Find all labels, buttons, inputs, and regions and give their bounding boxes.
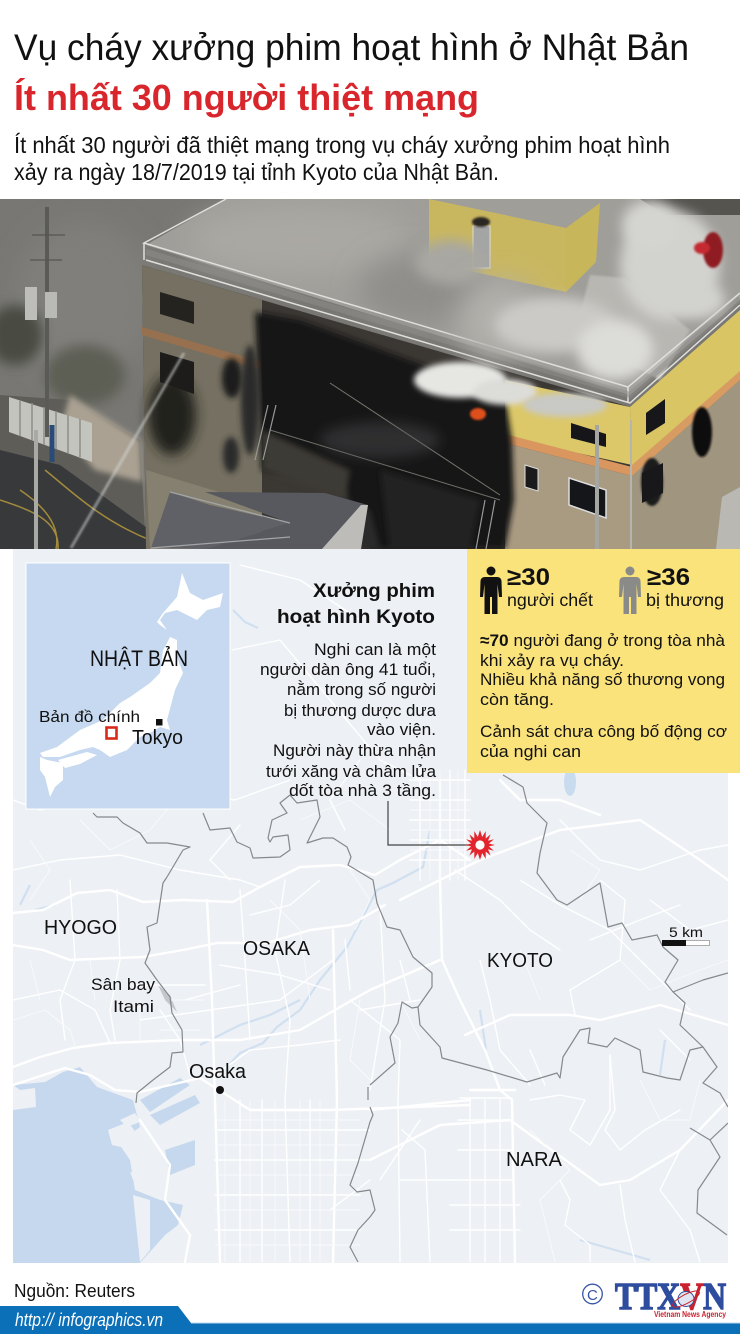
panel: casualty figures bbox=[467, 549, 740, 773]
Tokyo marker: Tokyo bbox=[132, 727, 183, 749]
icon: fire location burst bbox=[465, 830, 495, 860]
callout text: người dàn ông 41 tuổi, bbox=[260, 660, 436, 679]
panel text: Cảnh sát chưa công bố động cơ bbox=[480, 722, 727, 741]
callout text: nằm trong số người bbox=[287, 680, 436, 699]
logo: TTXVN: C bbox=[587, 1287, 598, 1304]
map labels: Itami bbox=[113, 997, 154, 1016]
map: Kansai region bbox=[13, 549, 728, 1263]
panel text: còn tăng. bbox=[480, 690, 554, 709]
title: Ít nhất 30 người thiệt mạng bbox=[14, 77, 479, 118]
callout text: Nghi can là một bbox=[314, 640, 436, 659]
walls bbox=[142, 265, 632, 549]
callout text: Người này thừa nhận bbox=[273, 741, 436, 760]
burn marks bbox=[255, 312, 514, 549]
panel text: Nhiều khả năng số thương vong bbox=[480, 670, 725, 689]
stat: dead bbox=[507, 564, 593, 610]
map labels: HYOGO bbox=[44, 916, 117, 939]
prefecture borders bbox=[93, 775, 728, 1262]
rivers and lakes bbox=[20, 610, 665, 1260]
Japan label: NHẬT BẢN bbox=[90, 646, 188, 671]
water spray bbox=[71, 353, 184, 548]
title: Vụ cháy xưởng phim hoạt hình ở Nhật Bản bbox=[14, 27, 689, 68]
windows bbox=[160, 292, 194, 324]
callout heading: hoạt hình Kyoto bbox=[277, 606, 435, 628]
thin roads bbox=[13, 770, 728, 1262]
map labels: Sân bay bbox=[91, 975, 156, 994]
photo: burning studio building bbox=[0, 199, 740, 549]
roof bbox=[146, 199, 740, 395]
panel text bbox=[480, 631, 727, 761]
footer band with website bbox=[0, 1306, 740, 1334]
icon: person black bbox=[480, 566, 502, 614]
main map marker: Bản đồ chính bbox=[39, 709, 140, 726]
stat: dead: người chết bbox=[507, 590, 593, 610]
intro text bbox=[14, 132, 670, 185]
thick roads bbox=[13, 780, 728, 1262]
scale bar: 5 km bbox=[669, 924, 703, 940]
callout heading: Xưởng phim bbox=[313, 580, 435, 602]
map labels: NARA bbox=[506, 1148, 562, 1171]
callout: Kyoto studio bbox=[260, 580, 437, 800]
panel text: ≈70 người đang ở trong tòa nhà bbox=[480, 631, 726, 650]
footer band with website: http:// infographics.vn bbox=[15, 1310, 163, 1330]
main map marker bbox=[39, 709, 140, 738]
front house roof bbox=[151, 492, 290, 549]
callout text: vào viện. bbox=[367, 720, 436, 739]
stat: dead: ≥30 bbox=[507, 564, 550, 591]
leader line to fire location bbox=[388, 801, 468, 845]
map labels: OSAKA bbox=[243, 937, 310, 960]
icon: person grey bbox=[619, 566, 641, 614]
stat: injured: bị thương bbox=[646, 590, 724, 610]
yellow penthouse bbox=[429, 199, 566, 292]
medium roads bbox=[13, 565, 728, 1262]
fire bbox=[470, 408, 486, 420]
logo: TTXVN: Vietnam News Agency bbox=[654, 1310, 726, 1319]
title bbox=[14, 27, 689, 118]
intro text: Ít nhất 30 người đã thiệt mạng trong vụ cháy xưởng phim hoạt hình bbox=[14, 132, 670, 158]
callout text: bị thương dược dưa bbox=[284, 701, 437, 720]
panel text: khi xảy ra vụ cháy. bbox=[480, 651, 624, 670]
sign bbox=[703, 232, 723, 268]
panel text: của nghi can bbox=[480, 742, 581, 761]
map labels: KYOTO bbox=[487, 949, 553, 972]
intro text: xảy ra ngày 18/7/2019 tại tỉnh Kyoto của Nhật Bản. bbox=[14, 159, 499, 185]
callout text: tưới xăng và châm lửa bbox=[266, 762, 437, 781]
sea: Osaka bay bbox=[13, 1067, 183, 1263]
railing bbox=[144, 199, 740, 403]
map labels: Osaka bbox=[189, 1060, 247, 1083]
panel: Japan inset map bbox=[26, 563, 230, 809]
callout heading bbox=[277, 580, 435, 628]
stat: injured bbox=[646, 564, 724, 610]
callout text: dốt tòa nhà 3 tầng. bbox=[289, 781, 436, 800]
callout text bbox=[260, 640, 437, 800]
Japan islands bbox=[40, 573, 223, 797]
logo: TTXVN: TTXVN bbox=[615, 1276, 726, 1318]
source: Nguồn: Reuters bbox=[14, 1281, 135, 1301]
smoke bbox=[460, 282, 540, 358]
map labels bbox=[44, 916, 562, 1171]
scale bar bbox=[662, 924, 710, 946]
stat: injured: ≥36 bbox=[647, 564, 690, 591]
